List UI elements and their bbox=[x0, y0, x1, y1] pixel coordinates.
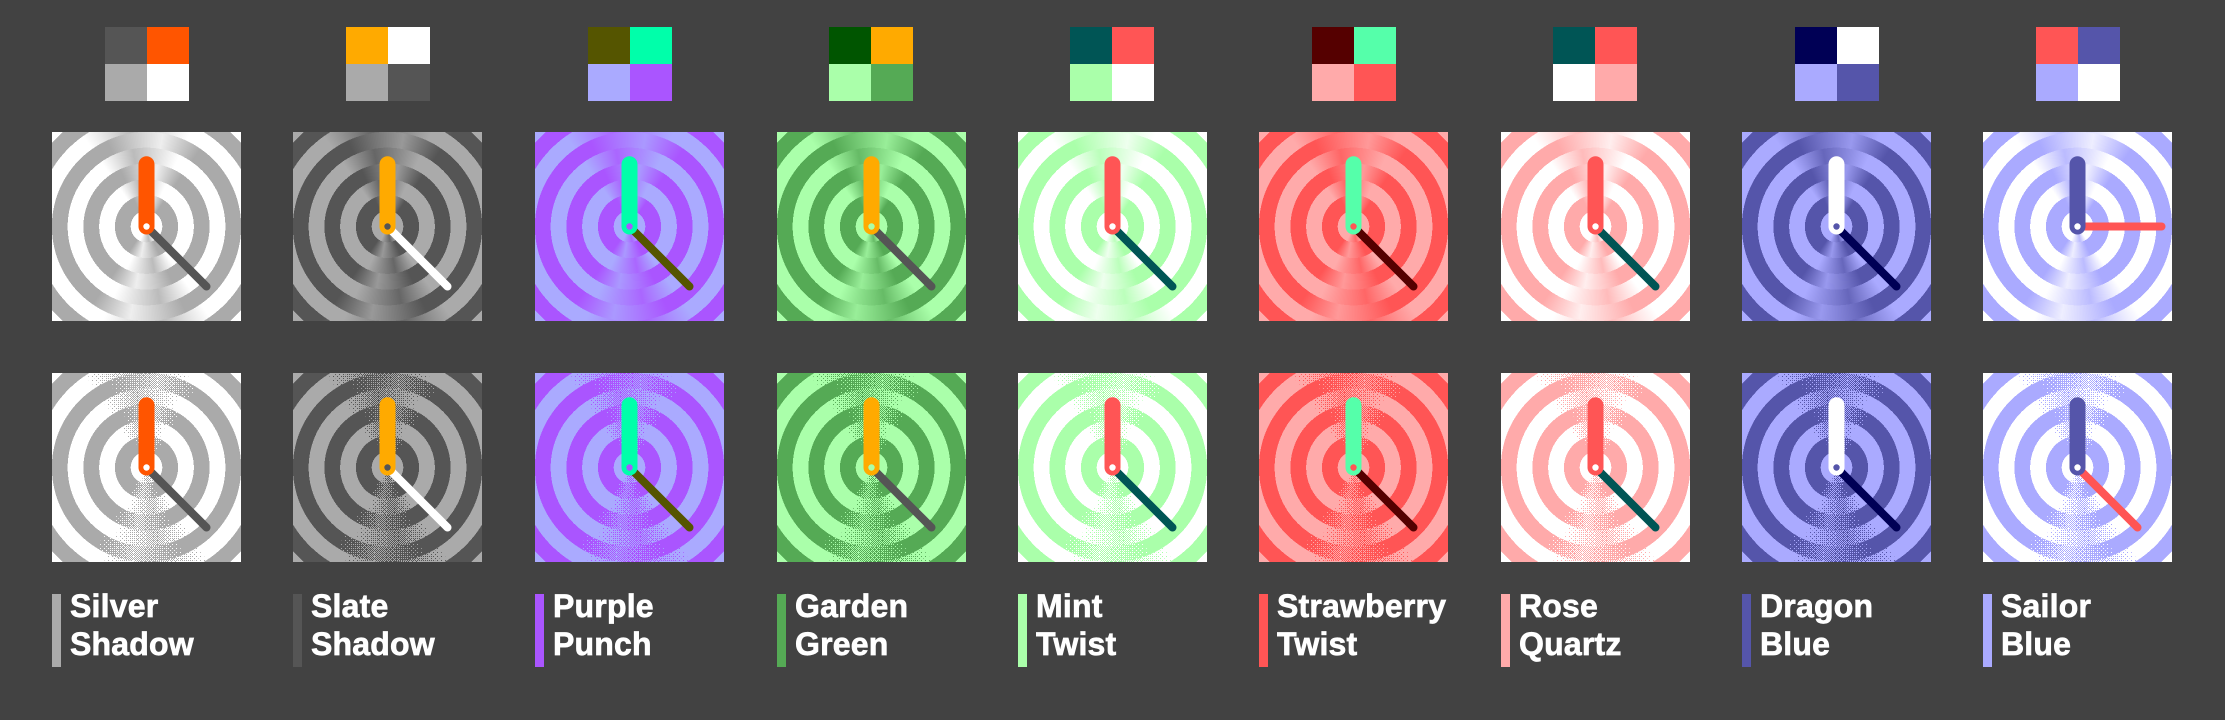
label bbox=[52, 588, 194, 667]
dithered clock bbox=[535, 373, 724, 562]
label: Dragon bbox=[1760, 588, 1873, 624]
palette swatch bbox=[2036, 27, 2120, 101]
palette swatch bbox=[588, 27, 672, 101]
label: Strawberry bbox=[1277, 588, 1446, 624]
label: Twist bbox=[1277, 626, 1357, 662]
palette swatch bbox=[1070, 27, 1154, 101]
label: Twist bbox=[1036, 626, 1116, 662]
label bbox=[535, 588, 654, 667]
label bbox=[1742, 588, 1873, 667]
panel: Garden Green bbox=[777, 27, 966, 667]
palette swatch bbox=[1553, 27, 1637, 101]
panel: Strawberry Twist bbox=[1259, 27, 1448, 667]
label: Rose bbox=[1519, 588, 1598, 624]
label bbox=[1018, 588, 1116, 667]
panel: Silver Shadow bbox=[52, 27, 241, 667]
label bbox=[1501, 588, 1622, 667]
label: Garden bbox=[795, 588, 908, 624]
label: Mint bbox=[1036, 588, 1103, 624]
label: Purple bbox=[553, 588, 654, 624]
label: Punch bbox=[553, 626, 652, 662]
label bbox=[777, 588, 908, 667]
smooth clock bbox=[1983, 132, 2172, 321]
panel: Slate Shadow bbox=[293, 27, 482, 667]
smooth clock bbox=[293, 132, 482, 321]
dithered clock bbox=[1018, 373, 1207, 562]
palette swatch bbox=[1795, 27, 1879, 101]
dithered clock bbox=[1501, 373, 1690, 562]
palette swatch bbox=[829, 27, 913, 101]
smooth clock bbox=[777, 132, 966, 321]
smooth clock bbox=[1018, 132, 1207, 321]
palette swatch bbox=[346, 27, 430, 101]
label: Blue bbox=[2001, 626, 2071, 662]
palette swatch bbox=[1312, 27, 1396, 101]
dithered clock bbox=[1742, 373, 1931, 562]
palette swatch bbox=[105, 27, 189, 101]
label bbox=[1259, 588, 1446, 667]
label: Shadow bbox=[311, 626, 435, 662]
panel: Rose Quartz bbox=[1501, 27, 1690, 667]
panel: Sailor Blue bbox=[1983, 27, 2172, 667]
smooth clock bbox=[1742, 132, 1931, 321]
label: Silver bbox=[70, 588, 158, 624]
label: Shadow bbox=[70, 626, 194, 662]
label: Slate bbox=[311, 588, 388, 624]
smooth clock bbox=[535, 132, 724, 321]
dithered clock bbox=[52, 373, 241, 562]
smooth clock bbox=[1501, 132, 1690, 321]
smooth clock bbox=[52, 132, 241, 321]
label bbox=[1983, 588, 2091, 667]
label: Quartz bbox=[1519, 626, 1622, 662]
dithered clock bbox=[1983, 373, 2172, 562]
panel: Purple Punch bbox=[535, 27, 724, 667]
label: Sailor bbox=[2001, 588, 2091, 624]
label bbox=[293, 588, 436, 667]
label: Blue bbox=[1760, 626, 1830, 662]
panel: Dragon Blue bbox=[1742, 27, 1931, 667]
dithered clock bbox=[1259, 373, 1448, 562]
dithered clock bbox=[293, 373, 482, 562]
dithered clock bbox=[777, 373, 966, 562]
label: Green bbox=[795, 626, 888, 662]
panel: Mint Twist bbox=[1018, 27, 1207, 667]
smooth clock bbox=[1259, 132, 1448, 321]
